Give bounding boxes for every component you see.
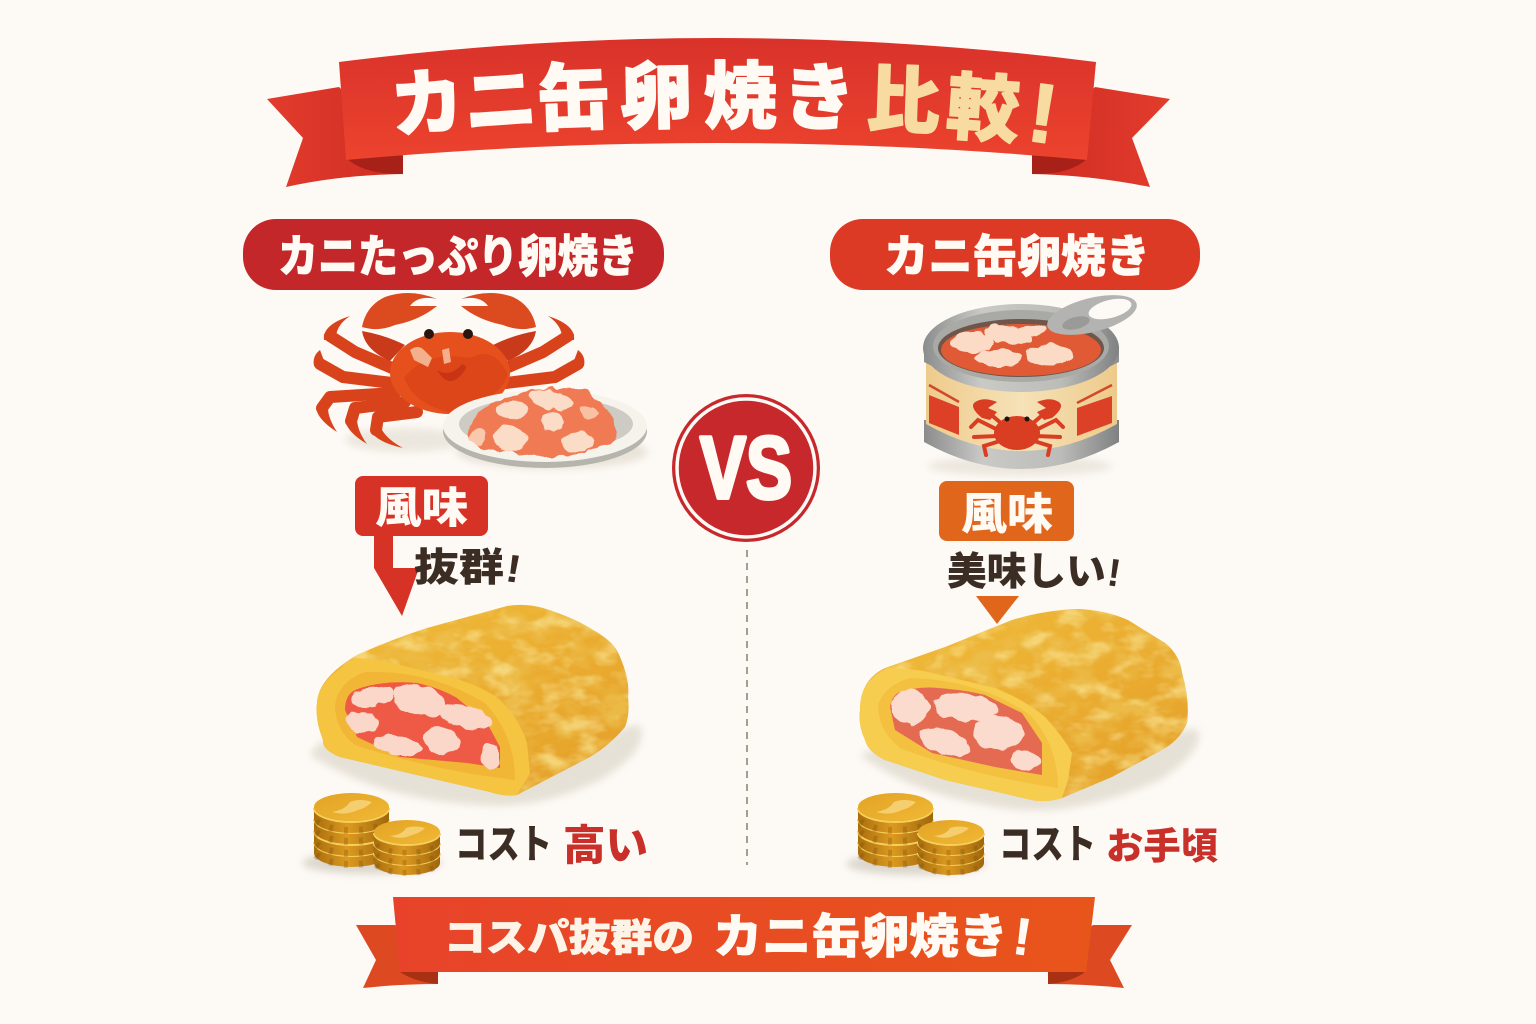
shadow	[310, 725, 642, 806]
cost value: お手頃	[1106, 826, 1218, 867]
VS badge	[672, 394, 820, 542]
arrow	[374, 534, 419, 616]
title text: カニ缶卵焼き	[387, 57, 856, 148]
can bottom rim	[924, 420, 1119, 469]
cost label: コスト	[455, 823, 552, 867]
crab shadow	[345, 428, 465, 452]
flavor verdict: 美味しい!	[947, 551, 1124, 596]
VS badge: VS	[700, 418, 792, 517]
crab right legs and claw	[461, 293, 584, 383]
arrow	[976, 596, 1019, 624]
illustration: crab and plate of crab meat	[314, 293, 648, 469]
can pull tab	[1043, 287, 1141, 343]
conclusion text: コスパ抜群の	[444, 918, 694, 960]
can crab meat	[952, 322, 1074, 367]
coins icon	[846, 793, 986, 875]
right flavor callout	[939, 481, 1124, 624]
conclusion accent text: カニ缶卵焼き	[713, 910, 1008, 963]
title accent text: 比較!	[865, 60, 1063, 162]
main ribbon	[393, 897, 1095, 972]
front face	[860, 668, 1072, 801]
front face	[317, 658, 530, 796]
can lid rim	[924, 348, 1119, 388]
browned mottling	[855, 605, 1190, 805]
plate shadow	[456, 435, 648, 469]
left cost row	[302, 793, 648, 875]
shadow	[860, 729, 1199, 811]
banner main ribbon	[339, 38, 1096, 160]
banner right tail	[1032, 87, 1170, 187]
left fold	[400, 972, 438, 984]
can shadow	[928, 456, 1112, 476]
coins icon	[302, 793, 442, 875]
banner right fold	[1032, 153, 1088, 174]
bottom banner	[356, 897, 1132, 988]
right fold	[1048, 972, 1085, 984]
crab body	[390, 332, 510, 414]
right flavor callout: 風味	[961, 490, 1053, 539]
cost value: 高い	[563, 822, 648, 869]
crab filling	[890, 688, 1042, 775]
flavor tag	[355, 476, 488, 536]
egg roll top and side	[317, 605, 629, 796]
can label stripes	[929, 395, 959, 435]
crab left legs and claw	[314, 293, 437, 448]
can label	[926, 360, 1117, 451]
right cost row	[846, 793, 1218, 875]
illustration: crab can	[923, 287, 1141, 476]
can crab emblem	[971, 399, 1063, 455]
left tail	[356, 925, 438, 988]
center divider	[746, 550, 748, 865]
left column heading	[243, 219, 664, 290]
browned mottling	[310, 600, 635, 800]
left flavor callout	[355, 476, 524, 616]
crab filling	[345, 682, 500, 768]
right tail	[1048, 925, 1132, 988]
left omelette illustration	[310, 600, 642, 806]
right omelette illustration	[855, 605, 1199, 811]
left flavor callout: 風味	[375, 485, 468, 533]
egg roll top and side	[860, 609, 1188, 801]
crab meat	[468, 385, 617, 457]
cost label: コスト	[999, 823, 1096, 867]
right column heading: カニ缶卵焼き	[884, 231, 1150, 282]
left column heading: カニたっぷり卵焼き	[278, 231, 638, 282]
banner left tail	[267, 87, 403, 187]
right column heading	[830, 219, 1200, 290]
title banner	[267, 38, 1170, 187]
banner left fold	[346, 153, 403, 174]
plate	[443, 394, 647, 468]
flavor tag	[939, 481, 1074, 541]
conclusion exclamation: !	[1010, 908, 1035, 967]
flavor verdict: 抜群!	[414, 547, 524, 592]
